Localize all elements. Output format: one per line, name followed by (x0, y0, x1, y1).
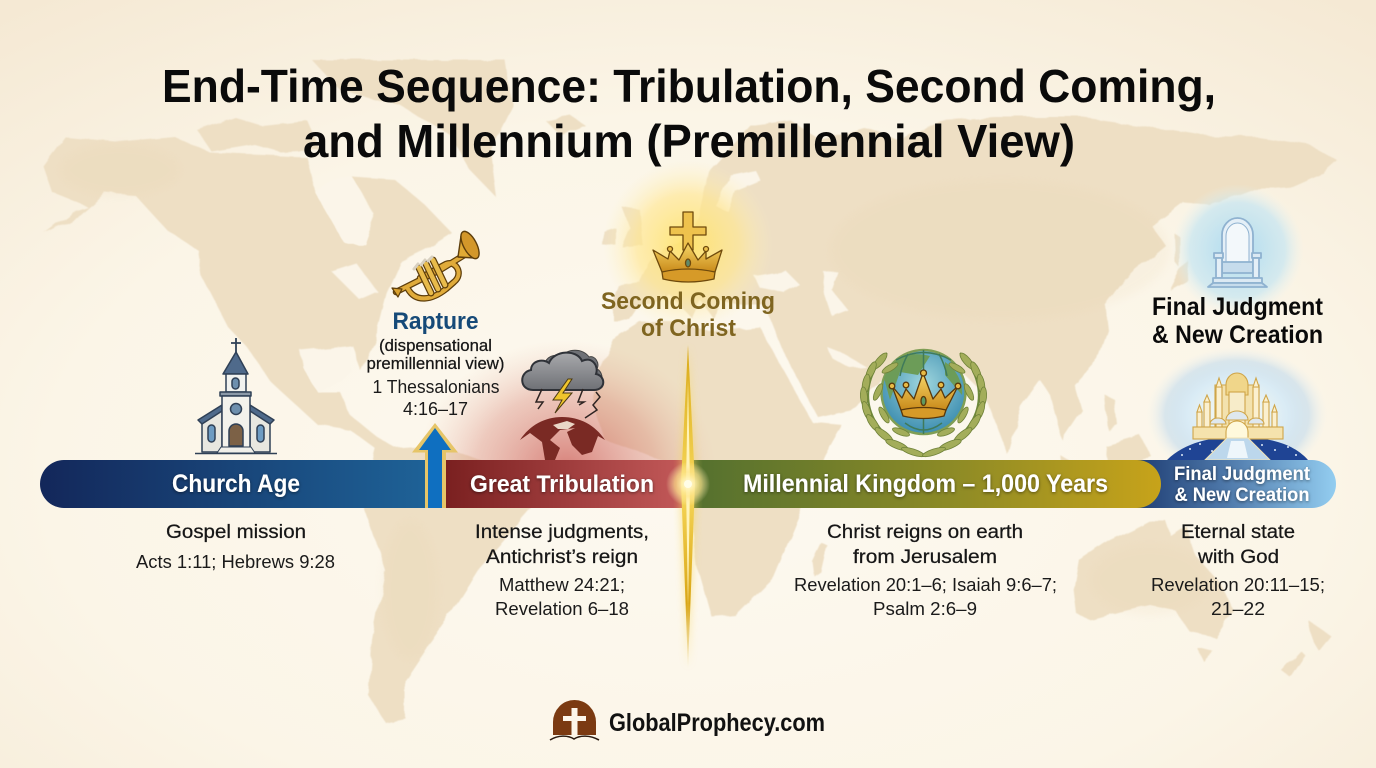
segment: Great Tribulation: Great Tribulation (470, 471, 654, 498)
text: Millennial Kingdom: Christ reigns on earth (827, 521, 1023, 543)
map: New Zealand (1281, 620, 1330, 677)
label: Rapture: Rapture (392, 308, 478, 335)
label: Rapture: 4:16–17 (403, 399, 468, 419)
icon: celestial city (1167, 373, 1308, 460)
segment: Church Age: Church Age (172, 470, 300, 498)
icon: trumpet (392, 229, 483, 298)
label: Second Coming of Christ: of Christ (641, 315, 736, 342)
footer logo (550, 700, 825, 740)
text: Great Tribulation: Revelation 6–18 (495, 599, 629, 619)
segment: Great Tribulation (446, 460, 689, 508)
text: Millennial Kingdom (794, 521, 1057, 619)
map: Southeast Asia islands (1060, 395, 1230, 495)
icon: church (195, 338, 277, 454)
segment: Millennial Kingdom: Millennial Kingdom – 1,000 Years (743, 470, 1108, 498)
text: Final Judgment: Eternal state (1181, 521, 1295, 543)
label: Second Coming of Christ: Second Coming (601, 288, 775, 315)
text: Great Tribulation: Intense judgments, (475, 521, 649, 543)
icon: globe with crown and laurel wreath (860, 350, 987, 459)
label: Final Judgment and New Creation (1152, 293, 1324, 349)
map: South America (365, 440, 535, 722)
faint map shading (60, 144, 1210, 660)
label: Final Judgment and New Creation: & New Creation (1152, 321, 1323, 349)
icon: cross and book (550, 700, 599, 740)
text: Millennial Kingdom: Psalm 2:6–9 (873, 599, 977, 619)
text: Great Tribulation: Antichrist’s reign (486, 546, 638, 568)
map: Australia (1075, 520, 1233, 637)
glow: second coming (603, 160, 773, 330)
icon: storm over red globe (520, 350, 605, 460)
map: Eurasia (612, 117, 1337, 455)
map: North America (44, 137, 452, 452)
second coming vertical beam (666, 345, 710, 668)
label: Rapture: premillennial view) (366, 355, 504, 373)
text: Final Judgment: 21–22 (1211, 599, 1265, 619)
glow: tribulation (440, 353, 682, 460)
segment: Final Judgment and New Creation: & New Creation (1174, 485, 1310, 506)
timeline bar (40, 460, 1336, 508)
label: Rapture: 1 Thessalonians (372, 377, 500, 397)
text: Final Judgment (1151, 521, 1325, 619)
map: Africa (592, 322, 842, 617)
text: Great Tribulation (475, 521, 649, 619)
icon: crown with cross (653, 212, 722, 282)
map: Arctic islands (197, 117, 320, 152)
text: Church Age (136, 521, 335, 572)
website name: GlobalProphecy.com (609, 709, 825, 737)
text: Millennial Kingdom: from Jerusalem (853, 546, 997, 568)
arrow: rapture (412, 423, 458, 508)
label: Second Coming of Christ (601, 288, 775, 342)
text: Final Judgment: Revelation 20:11–15; (1151, 575, 1325, 595)
text: Millennial Kingdom: Revelation 20:1–6; Isaiah 9:6–7; (794, 575, 1057, 595)
map: Greenland (312, 60, 512, 197)
label: Rapture: (dispensational (379, 337, 492, 355)
map: British Isles (603, 207, 643, 247)
map: Iceland and Svalbard (545, 115, 585, 135)
text: Final Judgment: with God (1197, 546, 1279, 568)
segment: Final Judgment and New Creation: Final Judgment (1174, 464, 1311, 485)
icon: throne (1208, 218, 1267, 287)
text: Great Tribulation: Matthew 24:21; (499, 575, 625, 595)
text: Church Age: Gospel mission (166, 521, 306, 543)
map: Tasmania (1197, 648, 1210, 662)
segment: Church Age (40, 460, 428, 508)
label: Rapture (366, 308, 504, 419)
title: and Millennium (Premillennial View) (303, 115, 1075, 167)
segment: Millennial Kingdom (688, 460, 1161, 508)
map: Madagascar (813, 543, 828, 577)
label: Final Judgment and New Creation: Final Judgment (1152, 293, 1324, 321)
title: End-Time Sequence: Tribulation, Second Coming, (162, 60, 1216, 112)
glow: celestial city (1154, 352, 1320, 454)
segment: Final Judgment and New Creation (1130, 460, 1336, 508)
inland seas (300, 170, 867, 392)
glow: throne (1172, 184, 1304, 316)
map: Japan (1170, 233, 1190, 290)
text: Church Age: Acts 1:11; Hebrews 9:28 (136, 552, 335, 572)
title (162, 60, 1216, 167)
